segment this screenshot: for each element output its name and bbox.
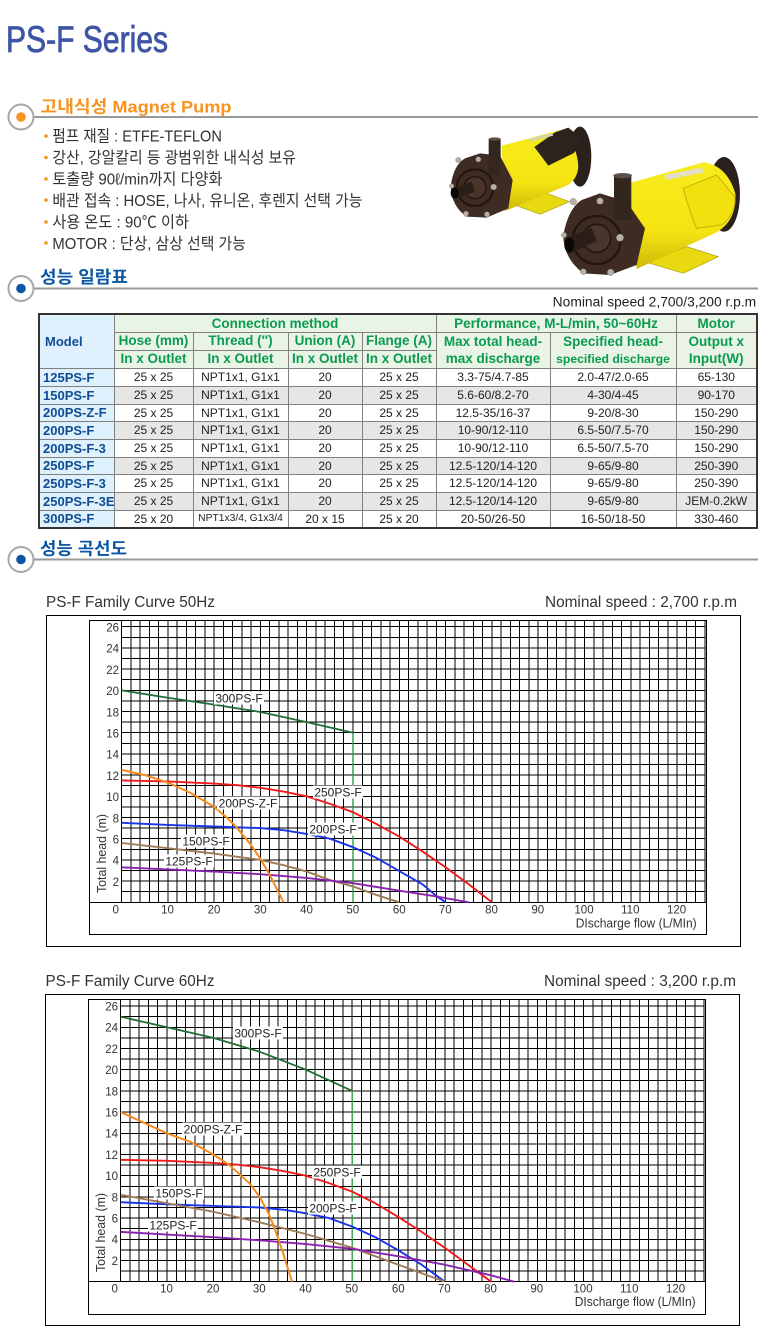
feature list: 토출량 90ℓ/min까지 다양화 [52,170,223,188]
row: 250PS-F: 250-390 [694,458,738,472]
table header row 3: max discharge [446,351,540,366]
x axis ticks 50Hz: 0 [112,904,119,916]
row: 150PS-F: 4-30/4-45 [587,388,639,402]
row: 300PS-F: 25 x 20 [379,512,419,526]
row: 200PS-F [40,422,756,439]
feature list: MOTOR : 단상, 삼상 선택 가능 [52,235,246,253]
y axis ticks 50Hz [106,622,120,889]
x axis ticks 50Hz: 90 [531,904,544,916]
row: 150PS-F: 90-170 [698,388,735,402]
curve labels 60Hz [148,1026,362,1232]
y axis ticks 60Hz: 2 [112,1256,118,1268]
x axis ticks 50Hz: 70 [439,904,452,916]
row: 125PS-F: 20 [318,370,332,384]
y axis ticks 50Hz: 18 [106,707,119,719]
icon: large pump [561,157,740,276]
table header row 2: Output x [689,334,744,348]
row: 250PS-F-3E: NPT1x1, G1x1 [201,494,280,508]
table header row 2: Specified head- [563,334,663,348]
label: 250PS-F: 250PS-F [313,1165,361,1179]
label: 300PS-F: 300PS-F [234,1026,282,1040]
x axis ticks 50Hz: 100 [574,904,594,916]
y axis ticks 50Hz: 12 [106,771,119,783]
row: 250PS-F: 25 x 25 [134,458,173,472]
row: 200PS-F-3: 25 x 25 [134,441,173,455]
row: 125PS-F: 2.0-47/2.0-65 [577,370,649,384]
row: 200PS-F: 25 x 25 [134,423,173,437]
row: 200PS-F: 6.5-50/7.5-70 [577,423,649,437]
y axis ticks 50Hz: 16 [106,728,119,740]
row: 150PS-F: NPT1x1, G1x1 [201,388,280,402]
row: 200PS-F: 25 x 25 [379,423,419,437]
table header row 3 [115,350,756,368]
row: 300PS-F: NPT1x3/4, G1x3/4 [198,513,283,524]
row: 300PS-F: 20-50/26-50 [461,512,525,526]
x axis ticks 50Hz: 50 [346,904,359,916]
row: 300PS-F [40,511,738,527]
y axis ticks 50Hz: 10 [106,792,119,804]
row: 250PS-F-3E: 9-65/9-80 [587,494,639,508]
chart title 50Hz: PS-F Family Curve 50Hz [46,594,215,611]
y axis ticks 60Hz: 8 [112,1192,118,1204]
y axis ticks 60Hz: 4 [112,1235,119,1247]
row: 125PS-F: 125PS-F [43,370,94,384]
row: 250PS-F-3: 9-65/9-80 [587,476,639,490]
label: 200PS-F: 200PS-F [309,822,357,836]
row: 250PS-F: NPT1x1, G1x1 [201,458,280,472]
chart: 60Hz family curve [46,973,740,1326]
x axis ticks 60Hz: 50 [345,1284,358,1296]
row: 200PS-F-3: NPT1x1, G1x1 [201,441,280,455]
row: 200PS-F: 20 [318,423,332,437]
label: 300PS-F: 300PS-F [215,691,263,705]
table header row 2: Union (A) [295,333,355,348]
row: 200PS-Z-F: 25 x 25 [134,406,173,420]
y axis ticks 60Hz: 26 [105,1002,118,1014]
x axis ticks 50Hz: 120 [667,904,686,916]
row: 125PS-F: 25 x 25 [379,370,419,384]
row: 200PS-F-3 [40,440,738,457]
row: 200PS-Z-F: NPT1x1, G1x1 [201,406,280,420]
y axis ticks 60Hz: 22 [105,1044,118,1056]
x axis ticks 50Hz: 110 [621,904,639,916]
row: 200PS-F-3: 10-90/12-110 [458,441,528,455]
row: 250PS-F-3E [40,493,756,510]
y axis ticks 50Hz: 24 [106,644,120,656]
section heading: performance table: 성능 일람표 [40,268,128,287]
x axis ticks 60Hz: 10 [160,1284,173,1296]
x axis ticks 60Hz: 120 [666,1284,685,1296]
y axis ticks 50Hz: 8 [113,813,119,825]
label: 150PS-F: 150PS-F [155,1186,203,1200]
label: 250PS-F: 250PS-F [314,785,362,799]
x axis ticks 60Hz: 40 [299,1284,312,1296]
row: 200PS-F-3: 20 [318,441,332,455]
curve labels 50Hz [164,691,363,868]
table header row 3: Input(W) [689,351,744,366]
panel: performance table: Model [45,334,83,349]
row: 200PS-F-3: 200PS-F-3 [43,440,106,456]
row: 250PS-F-3E: JEM-0.2kW [685,494,747,508]
y axis ticks 60Hz: 6 [112,1214,118,1226]
row: 250PS-F-3E: 25 x 25 [134,494,173,508]
row: 250PS-F-3: 12.5-120/14-120 [449,476,537,490]
x axis ticks 50Hz: 20 [208,904,220,916]
y axis ticks 60Hz: 24 [105,1023,119,1035]
y axis ticks 50Hz: 6 [113,834,119,846]
label: 150PS-F: 150PS-F [182,834,230,848]
row: 150PS-F: 25 x 25 [379,388,419,402]
row: 150PS-F: 20 [318,388,332,402]
row: 250PS-F-3: 250PS-F-3 [43,476,106,490]
x axis ticks 60Hz: 110 [620,1284,638,1296]
label: 200PS-F: 200PS-F [309,1201,357,1215]
label: 125PS-F: 125PS-F [165,854,213,868]
row: 250PS-F: 250PS-F [43,458,94,473]
y axis ticks 50Hz: 14 [106,750,120,762]
table header row 2: Thread (″) [208,333,273,348]
row: 125PS-F: 65-130 [698,370,735,384]
x axis ticks 50Hz: 30 [254,904,267,916]
x axis ticks 50Hz: 60 [393,904,406,916]
row: 125PS-F [40,369,735,386]
table header row 2 [115,333,756,350]
x axis ticks 60Hz: 30 [253,1284,266,1296]
icon: small pump [449,127,591,218]
row: 200PS-F: NPT1x1, G1x1 [201,423,280,437]
y axis ticks 50Hz: 2 [113,877,119,889]
table header row 1: Motor [698,316,735,330]
row: 250PS-F-3E: 20 [318,494,332,508]
panel: performance table [38,313,758,529]
section heading: performance curves: 성능 곡선도 [40,540,127,558]
nominal speed note: Nominal speed 2,700/3,200 r.p.m [553,294,756,310]
row: 200PS-F-3: 6.5-50/7.5-70 [577,441,649,455]
y axis ticks 50Hz: 26 [106,622,119,634]
row: 200PS-F: 10-90/12-110 [458,423,528,437]
y axis ticks 60Hz: 12 [105,1150,118,1162]
section heading: magnet pump: 고내식성 Magnet Pump [40,98,232,116]
row: 250PS-F-3 [40,475,738,492]
x axis ticks 60Hz: 60 [392,1284,405,1296]
feature list: 배관 접속 : HOSE, 나사, 유니온, 후렌지 선택 가능 [52,192,362,210]
row: 125PS-F: 3.3-75/4.7-85 [457,370,529,384]
row: 250PS-F-3: NPT1x1, G1x1 [201,476,280,490]
row: 200PS-Z-F: 200PS-Z-F [43,405,107,420]
x axis label 60Hz: DIscharge flow (L/MIn) [575,1295,696,1309]
x axis ticks 50Hz: 80 [485,904,498,916]
x axis ticks 50Hz: 10 [161,904,174,916]
row: 200PS-F: 200PS-F [43,422,94,438]
row: 150PS-F [40,387,756,404]
x axis ticks 60Hz: 70 [438,1284,451,1296]
row: 250PS-F: 12.5-120/14-120 [449,458,537,472]
x axis ticks 60Hz: 80 [484,1284,497,1296]
x axis ticks 50Hz [112,904,686,916]
row: 200PS-F: 150-290 [694,423,738,437]
row: 250PS-F [40,458,756,474]
table header row 1 [40,315,756,368]
y axis ticks 60Hz: 16 [105,1108,118,1120]
table header row 3: In x Outlet [120,351,186,366]
table header row 3: In x Outlet [366,351,432,366]
table header row 2: Hose (mm) [119,333,188,348]
x axis ticks 60Hz [111,1284,685,1296]
x axis label 50Hz: DIscharge flow (L/MIn) [576,916,697,930]
feature list [44,128,362,253]
y axis ticks 60Hz: 20 [105,1065,118,1077]
row: 200PS-F-3: 25 x 25 [379,441,419,455]
row: 250PS-F-3: 250-390 [694,476,738,490]
table header row 3: specified discharge [556,352,670,366]
y axis label 60Hz: Total head (m) [94,1193,108,1272]
chart: 50Hz family curve [46,594,740,946]
x axis ticks 50Hz: 40 [300,904,313,916]
icon: two magnet pumps [449,127,740,276]
row: 300PS-F: 330-460 [694,512,738,526]
feature list: 사용 온도 : 90℃ 이하 [52,214,189,232]
table header row 1: Performance, M-L/min, 50~60Hz [454,316,658,330]
row: 200PS-Z-F: 20 [318,406,332,420]
y axis ticks 60Hz: 14 [105,1129,119,1141]
row: 150PS-F: 25 x 25 [134,388,173,402]
row: 150PS-F: 5.6-60/8.2-70 [457,388,529,402]
section heading: magnet pump [8,98,758,130]
row: 200PS-Z-F: 9-20/8-30 [587,406,639,420]
x axis ticks 60Hz: 0 [111,1284,118,1296]
title: PS-F Series [6,19,168,60]
section heading: performance curves [8,540,758,572]
row: 250PS-F-3E: 25 x 25 [379,494,419,508]
y axis ticks 50Hz: 20 [106,686,119,698]
row: 300PS-F: 300PS-F [43,511,94,526]
curves 60Hz [121,1017,514,1282]
row: 250PS-F-3E: 250PS-F-3E [43,494,114,508]
row: 200PS-Z-F: 25 x 25 [379,406,419,420]
x axis ticks 60Hz: 90 [530,1284,543,1296]
table header row 3: In x Outlet [207,351,274,366]
y axis ticks 50Hz: 4 [113,856,120,868]
section heading: performance table [8,268,758,301]
chart title 60Hz: PS-F Family Curve 60Hz [46,973,214,990]
row: 200PS-Z-F: 12.5-35/16-37 [456,406,530,420]
x axis ticks 60Hz: 100 [573,1284,593,1296]
row: 250PS-F: 9-65/9-80 [587,458,639,472]
row: 150PS-F: 150PS-F [43,388,94,402]
y axis ticks 60Hz: 10 [105,1171,118,1183]
row: 200PS-Z-F: 150-290 [694,406,738,420]
row: 250PS-F-3: 25 x 25 [134,476,173,490]
y axis ticks 60Hz: 18 [105,1086,118,1098]
row: 125PS-F: 25 x 25 [134,370,173,384]
feature list: 펌프 재질 : ETFE-TEFLON [52,128,222,146]
label: 200PS-Z-F: 200PS-Z-F [219,796,277,810]
x axis ticks 60Hz: 20 [207,1284,219,1296]
row: 300PS-F: 20 x 15 [305,512,345,526]
row: 300PS-F: 16-50/18-50 [581,512,645,526]
table header row 2: Flange (A) [366,333,432,348]
curves 50Hz [122,690,492,902]
row: 200PS-Z-F [40,405,738,421]
row: 250PS-F-3: 20 [318,476,332,490]
y axis label 50Hz: Total head (m) [95,814,109,893]
label: 125PS-F: 125PS-F [149,1218,197,1232]
row: 300PS-F: 25 x 20 [134,512,173,526]
row: 250PS-F: 20 [318,458,332,472]
y axis ticks 60Hz [105,1002,119,1268]
nominal speed 50Hz: Nominal speed : 2,700 r.p.m [545,594,737,611]
table header row 2: Max total head- [444,334,542,348]
feature list: 강산, 강알칼리 등 광범위한 내식성 보유 [52,149,296,167]
y axis ticks 50Hz: 22 [106,665,119,677]
row: 250PS-F-3E: 12.5-120/14-120 [449,494,537,508]
row: 250PS-F: 25 x 25 [379,458,419,472]
table header row 1: Connection method [212,316,338,330]
table header row 3: In x Outlet [292,351,358,366]
label: 200PS-Z-F: 200PS-Z-F [184,1122,242,1136]
row: 200PS-F-3: 150-290 [694,441,738,455]
nominal speed 60Hz: Nominal speed : 3,200 r.p.m [544,973,736,990]
row: 125PS-F: NPT1x1, G1x1 [201,370,280,384]
row: 250PS-F-3: 25 x 25 [379,476,419,490]
